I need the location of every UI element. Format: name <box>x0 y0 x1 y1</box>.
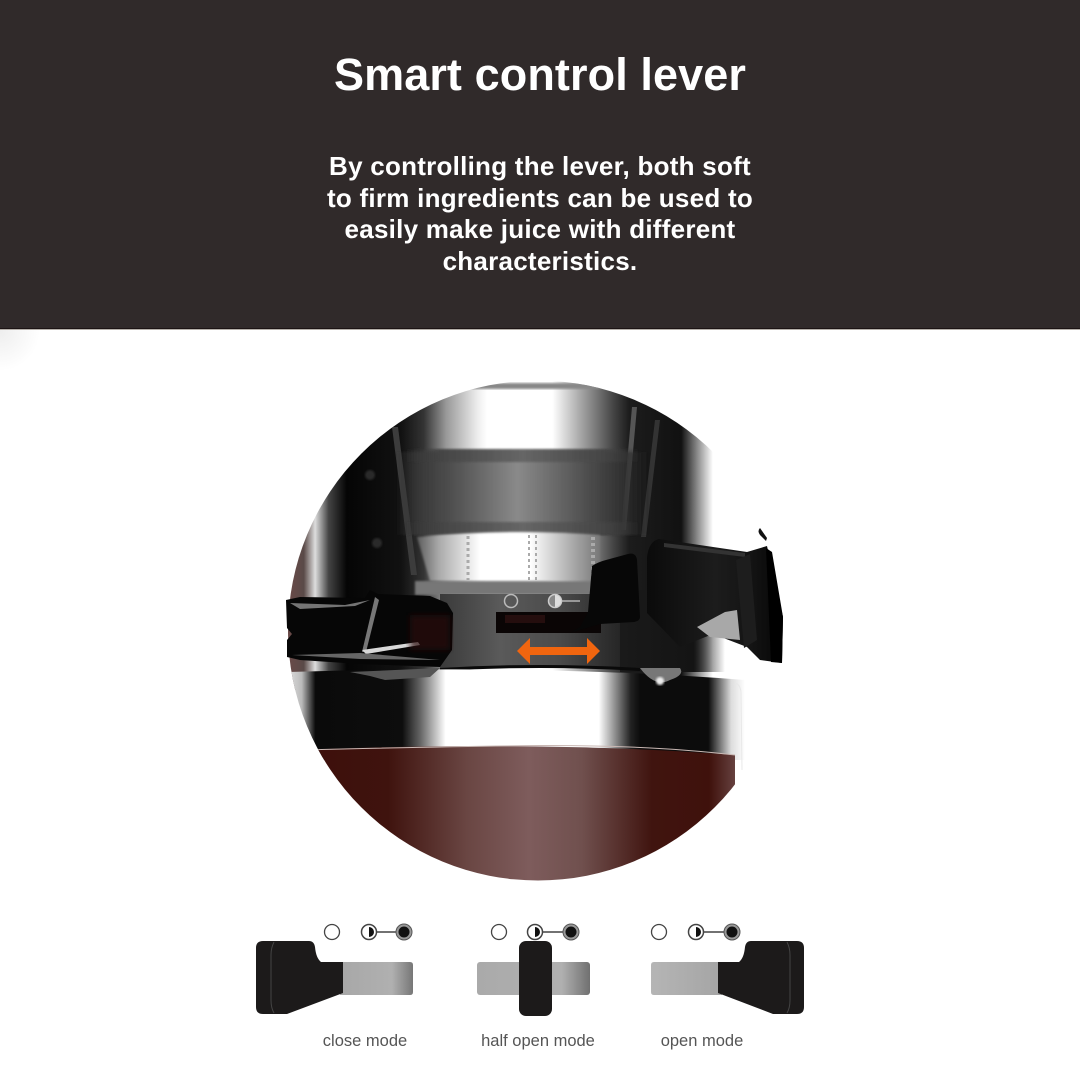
slider bar <box>477 962 590 995</box>
description text: to firm ingredients can be used to <box>327 182 753 212</box>
label: open mode <box>661 1032 743 1050</box>
left clamp arm <box>286 590 453 667</box>
lever icons on body <box>504 594 518 608</box>
collar rim <box>440 665 640 671</box>
label: close mode <box>323 1032 407 1050</box>
description text <box>327 151 753 276</box>
product photo: juicer close-up in circle <box>286 380 783 890</box>
perforated filter <box>417 532 600 581</box>
slider bar <box>651 962 722 995</box>
panel: dark header <box>0 0 1080 329</box>
label: half open mode <box>481 1032 595 1050</box>
maroon base <box>318 746 735 880</box>
lever <box>256 941 343 1014</box>
description text: easily make juice with different <box>345 214 735 244</box>
mode diagram: open mode <box>651 924 804 1050</box>
description text: characteristics. <box>443 246 637 276</box>
lever <box>519 941 552 1016</box>
slider bar <box>340 962 413 995</box>
juice spout <box>647 528 783 663</box>
description text: By controlling the lever, both soft <box>329 151 751 181</box>
upper cylinder <box>288 380 740 690</box>
slot <box>496 612 601 633</box>
lower silver ring <box>288 669 745 760</box>
mode indicator icons <box>492 924 579 940</box>
title: Smart control lever <box>334 49 746 100</box>
lever <box>718 941 804 1014</box>
arrow: lever direction <box>517 638 600 664</box>
lever handle <box>570 554 640 633</box>
lower strainer band <box>415 581 620 595</box>
mode diagram: close mode <box>256 924 413 1050</box>
inner strainer bands <box>395 452 650 535</box>
mode diagram: half open mode <box>477 924 595 1050</box>
corner shadow under header <box>0 330 40 370</box>
mode indicator icons <box>324 924 412 940</box>
thin base outline at right <box>735 683 742 770</box>
mode indicator icons <box>652 924 740 940</box>
